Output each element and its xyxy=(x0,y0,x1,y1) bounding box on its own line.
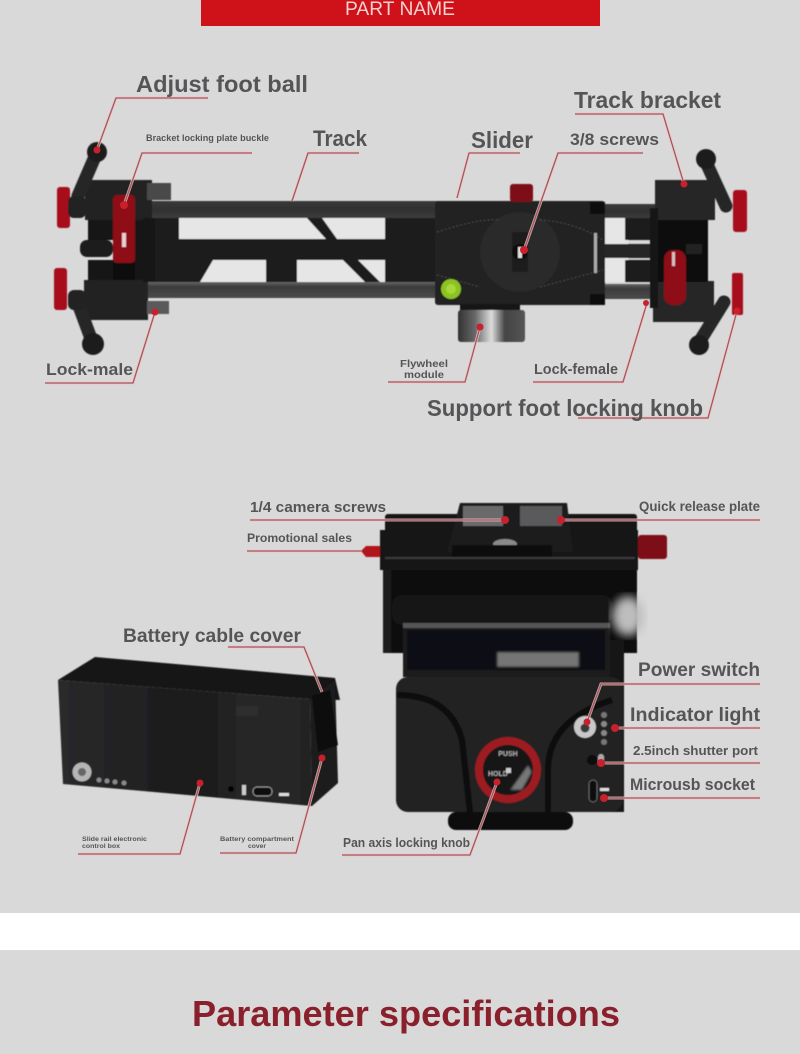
callout: flywheel module: Flywheel xyxy=(400,358,448,370)
callout: 3/8 screws: 3/8 screws xyxy=(570,130,659,149)
right track bracket xyxy=(650,180,715,322)
callout: promotional sales xyxy=(247,531,362,551)
callout: flywheel module: module xyxy=(404,369,444,381)
callout: slide rail electronic control box xyxy=(78,780,204,854)
callout: microusb socket xyxy=(600,776,760,802)
callout: support foot locking knob xyxy=(427,308,740,421)
callout: battery cable cover xyxy=(123,626,322,692)
callout: pan axis locking knob: Pan axis locking knob xyxy=(343,835,470,850)
left foot handles and knobs xyxy=(54,142,107,355)
callout: adjust foot ball: Adjust foot ball xyxy=(136,71,308,97)
callout: shutter port: 2.5inch shutter port xyxy=(633,743,759,758)
callout: track: Track xyxy=(313,126,368,151)
callout: lock-male xyxy=(45,308,158,383)
callout: slider xyxy=(457,127,533,198)
callout: quick release plate: Quick release plate xyxy=(639,499,760,514)
callout: power switch xyxy=(584,660,760,726)
callout: quick release plate xyxy=(557,499,760,524)
flywheel module xyxy=(458,310,525,342)
callout: track xyxy=(292,126,368,201)
callout: adjust foot ball xyxy=(94,71,308,154)
light windows between rails xyxy=(170,218,435,282)
slider carriage xyxy=(435,184,605,312)
upper body xyxy=(385,514,637,570)
product photo: slider track xyxy=(54,142,747,355)
callout: flywheel module xyxy=(388,324,484,382)
pan lock dial xyxy=(475,737,541,803)
right foot handles and knobs xyxy=(689,149,747,355)
callout: track bracket xyxy=(574,87,721,188)
quick release plate xyxy=(447,503,573,552)
track rails xyxy=(143,201,438,218)
callout: 1/4 camera screws: 1/4 camera screws xyxy=(250,499,386,516)
white separator band xyxy=(0,913,800,950)
callout: slider: Slider xyxy=(471,127,533,153)
callout: indicator light: Indicator light xyxy=(630,705,761,726)
callout: lock-female xyxy=(533,300,649,382)
callout: power switch: Power switch xyxy=(638,660,760,681)
callout: battery compartment cover xyxy=(220,754,326,853)
belt xyxy=(150,239,440,260)
heading: parameter specifications: Parameter specifications xyxy=(192,993,620,1034)
left track bracket xyxy=(80,180,171,320)
callout: promotional sales: Promotional sales xyxy=(247,531,352,545)
callout: 3/8 screws xyxy=(520,130,659,254)
callout: support foot locking knob: Support foot locking knob xyxy=(427,395,703,421)
callout: 1/4 camera screws xyxy=(250,499,509,524)
power button and indicators xyxy=(574,712,609,802)
banner: part name xyxy=(201,0,600,26)
product photo: battery box xyxy=(58,657,340,806)
callout: slide rail electronic control box: control box xyxy=(82,843,120,850)
middle label panel xyxy=(403,623,610,677)
product photo: pan head xyxy=(361,503,667,830)
callout: indicator light xyxy=(611,705,761,732)
side knobs xyxy=(361,546,380,557)
callout: pan axis locking knob xyxy=(342,778,500,855)
callout: track bracket: Track bracket xyxy=(574,87,721,113)
callout: microusb socket: Microusb socket xyxy=(630,776,755,794)
callout: slide rail electronic control box: Slide rail electronic xyxy=(82,836,147,843)
callout: battery compartment cover: cover xyxy=(248,843,266,850)
callout: lock-female: Lock-female xyxy=(534,362,618,378)
callout: battery compartment cover: Battery compartment xyxy=(220,836,295,843)
lower body xyxy=(610,640,624,812)
pan lock dial: HOLD xyxy=(488,771,508,778)
callout: bracket locking plate buckle: Bracket locking plate buckle xyxy=(146,133,269,144)
pan lock dial: PUSH xyxy=(498,751,518,758)
callout: shutter port xyxy=(597,743,760,767)
callout: bracket locking plate buckle xyxy=(120,133,269,209)
blur patch xyxy=(612,596,644,636)
callout: lock-male: Lock-male xyxy=(46,360,133,379)
callout: battery cable cover: Battery cable cover xyxy=(123,626,302,647)
rear dark cross pieces xyxy=(143,218,655,282)
